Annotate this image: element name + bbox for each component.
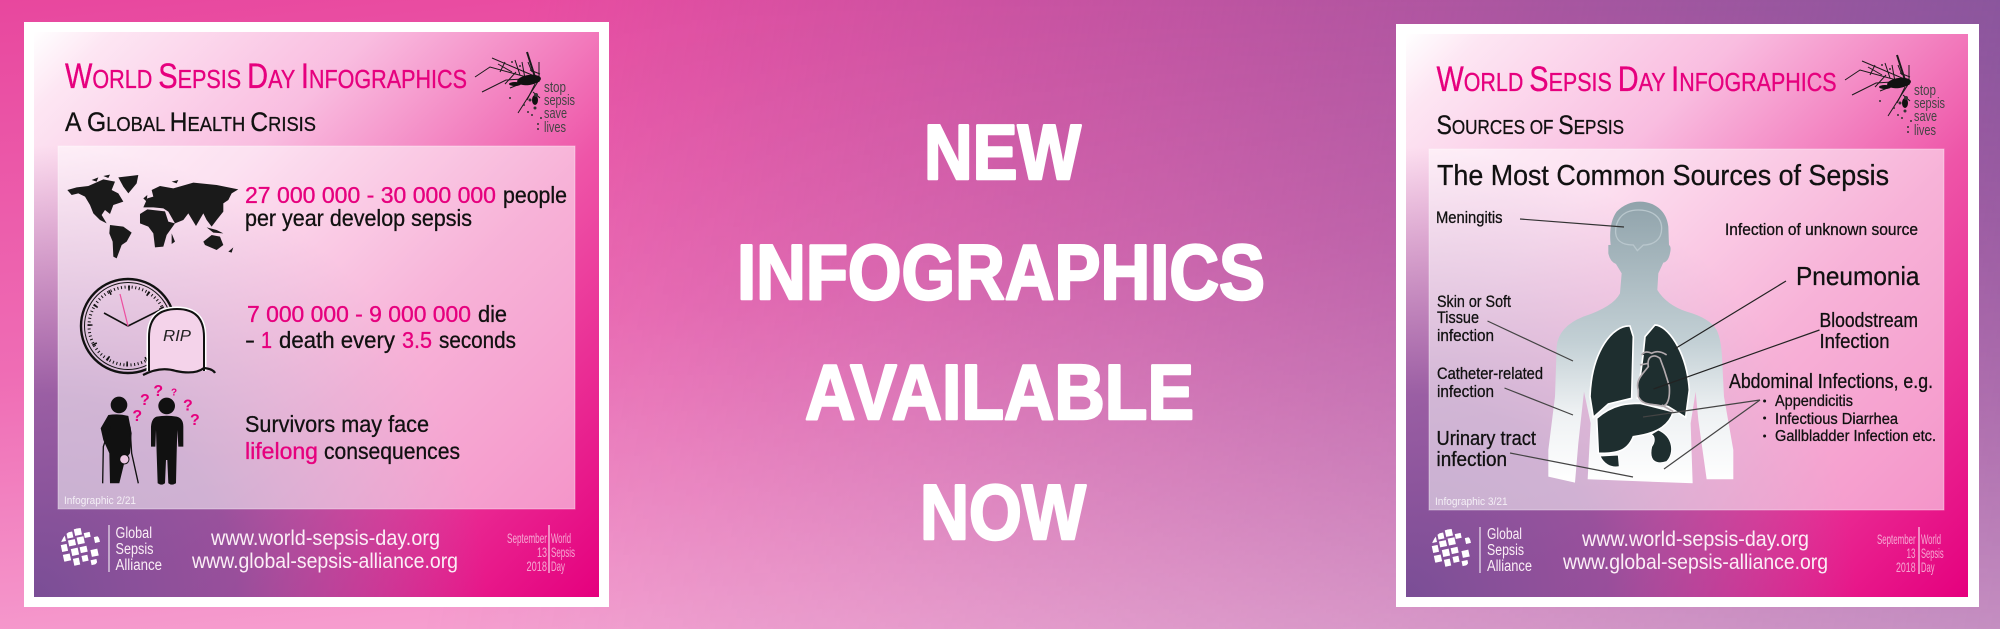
footer: date: Day: [1921, 559, 1934, 575]
footer: website links: www.world-sepsis-day.org: [210, 527, 440, 550]
icon: world map: [67, 175, 238, 258]
stop sepsis save lives logo: stop: [1914, 82, 1936, 99]
white frame: [24, 22, 609, 607]
footer: date: September: [1877, 531, 1916, 547]
footer: website links: www.global-sepsis-alliance.org: [191, 550, 458, 573]
stat: deaths: 1: [261, 327, 272, 353]
stop sepsis save lives logo: stop: [544, 79, 566, 96]
right infographic card: [1396, 24, 1979, 607]
stat: people develop sepsis: per year develop sepsis: [245, 205, 472, 231]
label: abdominal infections: Abdominal Infections, e.g.: [1729, 371, 1933, 393]
label: bloodstream: Infection: [1820, 331, 1890, 353]
label: urinary tract: Urinary tract: [1436, 428, 1536, 450]
label: abdominal infections: Appendicitis: [1775, 393, 1853, 410]
person on crutches: [101, 397, 138, 483]
left infographic card: [24, 22, 609, 607]
heading line: AVAILABLE: AVAILABLE: [805, 348, 1194, 436]
footer: date: September: [507, 530, 547, 546]
organs: [1590, 325, 1689, 467]
footer: Global Sepsis Alliance logo: Global: [116, 525, 152, 542]
footer: date: [507, 525, 575, 574]
stat: deaths: death every: [279, 327, 395, 353]
label: catheter-related: Catheter-related: [1437, 364, 1543, 383]
stat: deaths: seconds: [439, 327, 516, 353]
statement: survivors: lifelong: [245, 438, 318, 464]
stat: deaths: die: [478, 301, 507, 327]
label: skin or soft tissue: [1437, 292, 1573, 361]
footer: date: 13: [1906, 545, 1916, 561]
title: WORLD SEPSIS DAY INFOGRAPHICS: [1436, 60, 1836, 99]
footer: website links: www.world-sepsis-day.org: [1581, 528, 1809, 551]
panel heading: The Most Common Sources of Sepsis: [1437, 160, 1889, 192]
title: WORLD SEPSIS DAY INFOGRAPHICS: [65, 57, 467, 96]
footer: website links: [1562, 528, 1828, 574]
stat: deaths: -: [245, 327, 255, 353]
label: bloodstream: Bloodstream: [1820, 310, 1918, 332]
footer: date: Day: [551, 558, 565, 574]
question marks: ?: [190, 412, 200, 429]
label: Meningitis: [1436, 208, 1624, 227]
label: Meningitis: Meningitis: [1436, 208, 1502, 227]
gravestone: RIP: [163, 328, 191, 345]
stop sepsis save lives logo: sepsis: [1914, 95, 1945, 112]
subtitle: SOURCES OF SEPSIS: [1436, 110, 1624, 140]
statement: survivors: Survivors may face: [245, 411, 429, 437]
footer: date: World: [1921, 531, 1941, 547]
center heading: [737, 108, 1265, 556]
label: skin or soft tissue: Skin or Soft: [1437, 292, 1511, 311]
stat: people develop sepsis: [245, 182, 567, 231]
stop sepsis save lives logo: lives: [1914, 122, 1936, 139]
label: unknown source: Infection of unknown source: [1725, 220, 1918, 239]
stop sepsis save lives logo: lives: [544, 119, 566, 136]
footer: date: Sepsis: [1921, 545, 1944, 561]
icon: survivors with question marks: [101, 383, 200, 485]
footer: date: 2018: [1896, 559, 1916, 575]
icon: clock and gravestone: [81, 279, 215, 375]
label: bloodstream: [1654, 310, 1918, 389]
stat: deaths: 3.5: [402, 327, 432, 353]
question marks: ?: [140, 392, 150, 409]
heart outline: [1638, 352, 1673, 412]
stop sepsis save lives logo: sepsis: [544, 92, 575, 109]
card gradient: [34, 32, 599, 597]
footer: Global Sepsis Alliance logo: Sepsis: [1487, 542, 1524, 559]
clock: [81, 279, 175, 373]
label: abdominal infections: [1643, 371, 1936, 469]
heading line: NOW: NOW: [920, 468, 1086, 556]
label: catheter-related: [1437, 364, 1573, 415]
footer: date: [1877, 527, 1944, 575]
infographic number: Infographic 2/21: [64, 495, 136, 507]
label: urinary tract: [1436, 428, 1633, 477]
footer: Global Sepsis Alliance logo: Sepsis: [116, 541, 154, 558]
question marks: ?: [132, 408, 142, 425]
footer: date: 2018: [526, 558, 547, 574]
stat: deaths: [245, 301, 516, 353]
card gradient: [1406, 34, 1968, 597]
stat: people develop sepsis: 27 000 000 - 30 000 000: [245, 182, 496, 208]
body silhouette: [1548, 202, 1733, 483]
stat: deaths: 7 000 000 - 9 000 000: [247, 301, 471, 327]
subtitle: A GLOBAL HEALTH CRISIS: [65, 107, 316, 137]
stat: people develop sepsis: people: [503, 182, 567, 208]
label: urinary tract: infection: [1436, 449, 1507, 471]
footer: Global Sepsis Alliance logo: [1432, 527, 1532, 573]
question marks: ?: [183, 398, 193, 415]
content panel: [58, 146, 575, 509]
content panel: [1429, 149, 1944, 510]
label: Pneumonia: Pneumonia: [1796, 261, 1920, 291]
white frame: [1396, 24, 1979, 607]
infographic number: Infographic 3/21: [1435, 496, 1508, 508]
footer: date: Sepsis: [551, 544, 575, 560]
label: skin or soft tissue: Tissue: [1437, 308, 1479, 327]
label: Pneumonia: [1674, 261, 1920, 349]
question marks: ?: [171, 388, 177, 399]
footer: Global Sepsis Alliance logo: Global: [1487, 526, 1522, 543]
brain outline: [1616, 210, 1662, 251]
footer: Global Sepsis Alliance logo: Alliance: [1487, 558, 1532, 575]
stop sepsis save lives logo: save: [544, 105, 567, 122]
stop sepsis save lives logo: [475, 52, 575, 136]
footer: date: 13: [537, 544, 547, 560]
standing person: [151, 398, 183, 485]
footer: Global Sepsis Alliance logo: Alliance: [116, 557, 162, 574]
statement: survivors: consequences: [324, 438, 460, 464]
question marks: [132, 383, 200, 429]
body diagram: [1548, 202, 1733, 483]
label: abdominal infections: Infectious Diarrhea: [1775, 411, 1898, 428]
label: skin or soft tissue: infection: [1437, 326, 1494, 345]
footer: website links: www.global-sepsis-alliance.org: [1562, 551, 1828, 574]
label: catheter-related: infection: [1437, 382, 1494, 401]
question marks: ?: [153, 383, 163, 400]
stop sepsis save lives logo: [1845, 55, 1945, 139]
footer: website links: [191, 527, 458, 573]
statement: survivors: [245, 411, 460, 464]
footer: Global Sepsis Alliance logo: [58, 524, 162, 574]
stop sepsis save lives logo: save: [1914, 108, 1937, 125]
heading line: NEW: NEW: [924, 108, 1081, 196]
label: abdominal infections: Gallbladder Infection etc.: [1775, 428, 1936, 445]
heading line: INFOGRAPHICS: INFOGRAPHICS: [737, 228, 1265, 316]
footer: date: World: [551, 530, 571, 546]
